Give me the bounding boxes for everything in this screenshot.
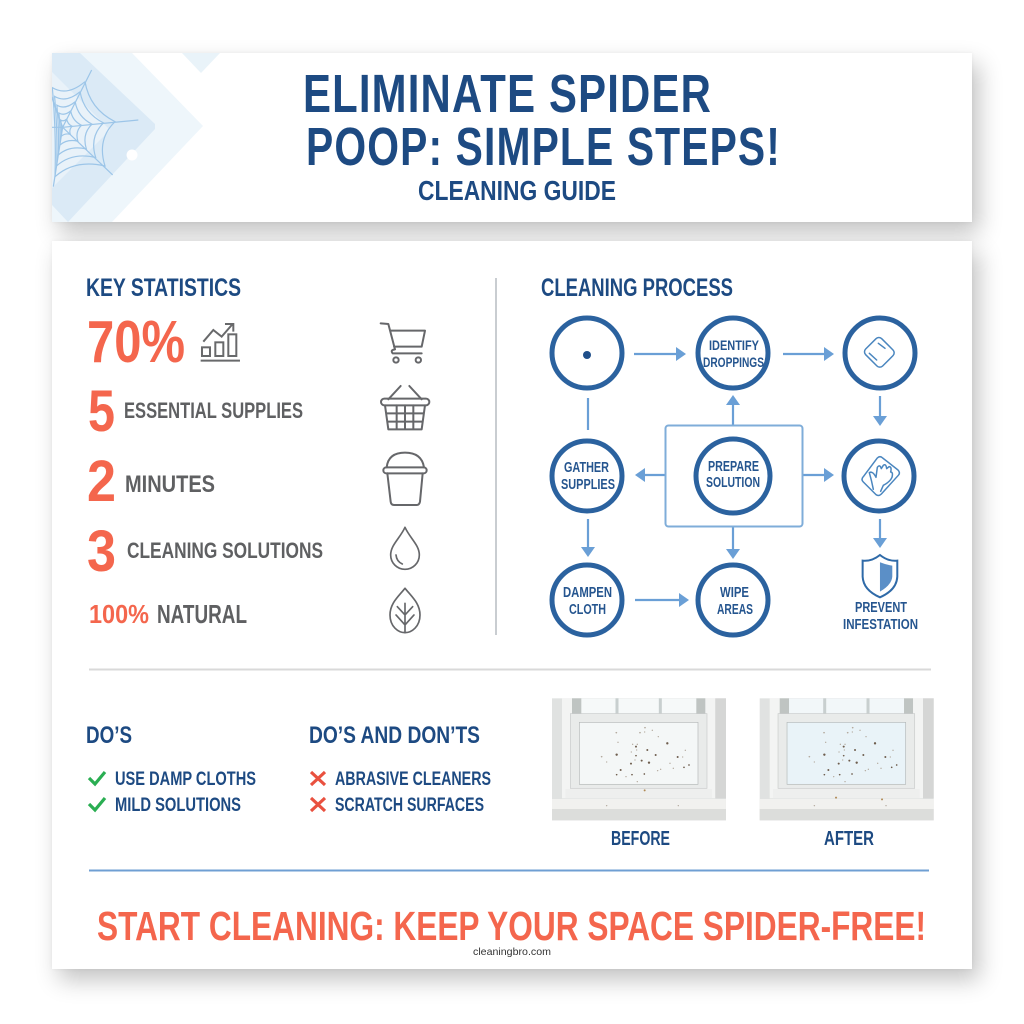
step: identify droppings — [698, 318, 768, 388]
step: gather supplies — [552, 441, 622, 511]
step: prepare solution: SOLUTION — [706, 475, 760, 491]
step: wipe areas — [698, 565, 768, 635]
heading: do's and don'ts: DO’S AND DON’TS — [309, 722, 480, 749]
photo: before window — [552, 698, 726, 820]
flow arrows — [581, 347, 887, 607]
label: before: BEFORE — [611, 828, 670, 850]
stat: 3 cleaning solutions — [87, 519, 323, 584]
do's list: MILD SOLUTIONS — [115, 795, 241, 816]
heading: do's: DO’S — [86, 722, 132, 749]
don'ts list — [311, 769, 491, 816]
footer: source: cleaningbro.com — [473, 946, 551, 958]
step: start dot — [552, 318, 622, 388]
stat: 100% natural: NATURAL — [157, 599, 247, 629]
title: ELIMINATE SPIDER — [303, 64, 712, 124]
don'ts list: ABRASIVE CLEANERS — [335, 769, 491, 790]
step: gather supplies: GATHER — [564, 460, 609, 476]
icon: shopping cart — [381, 323, 425, 363]
photo: after window — [760, 698, 934, 820]
icon: basket — [381, 386, 429, 429]
step: dampen cloth: CLOTH — [569, 602, 606, 618]
stat: 3 cleaning solutions: 3 — [87, 519, 116, 584]
step: prepare solution: PREPARE — [708, 459, 759, 475]
step: wiping hand icon — [844, 441, 914, 511]
panel: header card — [52, 53, 972, 222]
do's list: USE DAMP CLOTHS — [115, 769, 256, 790]
step: dampen cloth — [552, 565, 622, 635]
icon: water drop — [391, 527, 419, 569]
stat: 2 minutes — [87, 449, 215, 514]
step label: prevent infestation — [843, 600, 918, 633]
stat: 2 minutes: 2 — [87, 449, 116, 514]
stat: 5 essential supplies — [88, 379, 303, 444]
stat: 2 minutes: MINUTES — [125, 471, 215, 498]
stat: 5 essential supplies: 5 — [88, 379, 115, 444]
icon: leaf — [390, 588, 420, 633]
heading: key statistics: KEY STATISTICS — [86, 274, 241, 302]
don'ts list: SCRATCH SURFACES — [335, 795, 484, 816]
panel: main card — [52, 241, 972, 969]
stat: 70%: 70% — [87, 309, 185, 375]
title — [303, 64, 781, 177]
infographic artwork — [52, 53, 934, 957]
stat: 100% natural: 100% — [89, 599, 149, 629]
step: identify droppings: DROPPINGS — [703, 354, 764, 370]
step: identify droppings: IDENTIFY — [709, 337, 760, 353]
icon: shield — [863, 555, 897, 597]
icon: spider web with diamonds — [47, 53, 220, 222]
step: wipe areas: WIPE — [720, 585, 749, 601]
center box — [666, 426, 802, 526]
step label: prevent infestation: INFESTATION — [843, 617, 918, 633]
step: prepare solution — [696, 439, 770, 513]
step: gather supplies: SUPPLIES — [561, 477, 615, 493]
stat: 5 essential supplies: ESSENTIAL SUPPLIES — [124, 398, 303, 423]
icon: rising bar chart — [201, 324, 240, 361]
icon: bucket — [383, 453, 427, 505]
stat: 3 cleaning solutions: CLEANING SOLUTIONS — [127, 538, 323, 563]
step label: prevent infestation: PREVENT — [855, 600, 907, 616]
do's list — [89, 769, 256, 816]
heading: cleaning process: CLEANING PROCESS — [541, 274, 733, 302]
stat: 100% natural — [89, 599, 247, 629]
step: wipe areas: AREAS — [717, 602, 753, 618]
subtitle: CLEANING GUIDE — [418, 175, 616, 206]
step: tile icon — [845, 318, 915, 388]
label: after: AFTER — [824, 828, 874, 850]
step: dampen cloth: DAMPEN — [563, 585, 612, 601]
title: POOP: SIMPLE STEPS! — [306, 117, 781, 177]
